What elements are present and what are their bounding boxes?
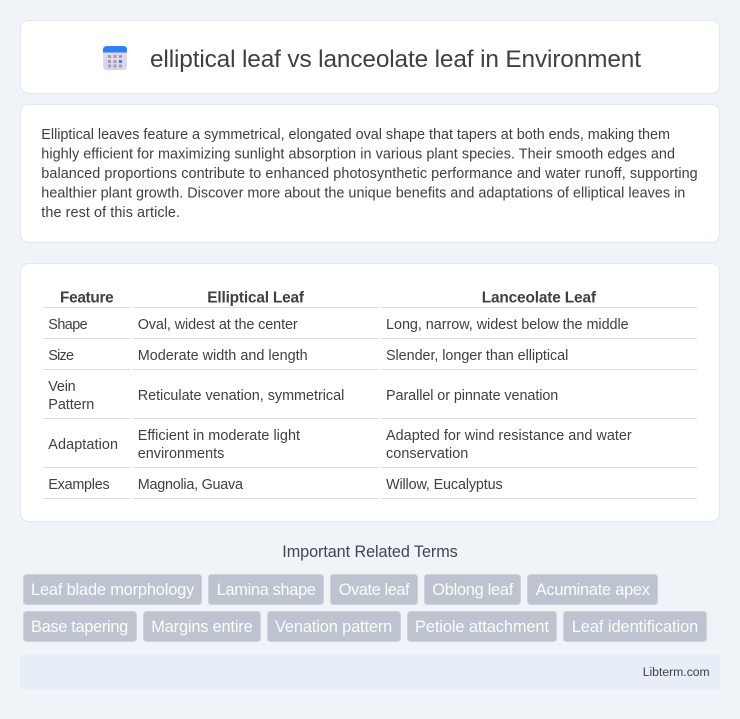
icon: calendar (103, 46, 127, 70)
footer bar (20, 655, 720, 689)
tag: Lamina shape (208, 574, 324, 604)
text block: description: balanced proportions contribute to enhanced photosynthetic performance and water runoff, supporting (41, 166, 698, 182)
tag: Base tapering: Base tapering (31, 618, 128, 636)
tag: Petiole attachment (408, 612, 556, 642)
tag: Ovate leaf: Ovate leaf (339, 581, 410, 599)
row: vein pattern: Reticulate venation, symmetrical (138, 388, 344, 404)
row: adaptation: Adaptation (48, 437, 118, 453)
row: examples: Magnolia, Guava (138, 477, 243, 493)
row: examples (48, 477, 503, 493)
panel: header (20, 20, 720, 94)
row: adaptation: Efficient in moderate light (138, 428, 300, 444)
row: examples: Willow, Eucalyptus (386, 477, 503, 493)
table header: Lanceolate Leaf (482, 289, 597, 306)
tag: Leaf blade morphology (24, 574, 202, 604)
tag: Acuminate apex (528, 574, 658, 604)
footer credit: Libterm.com (643, 665, 710, 679)
tag: Margins entire: Margins entire (151, 618, 253, 636)
tag: Lamina shape: Lamina shape (217, 581, 316, 599)
panel: comparison table (20, 264, 720, 522)
tag: Oblong leaf: Oblong leaf (432, 581, 514, 599)
row: size: Slender, longer than elliptical (386, 348, 568, 364)
tag: Venation pattern: Venation pattern (275, 618, 392, 636)
row: vein pattern (48, 379, 558, 413)
text block: description: the rest of this article. (41, 205, 180, 221)
row: adaptation: environments (138, 446, 224, 462)
row: size: Moderate width and length (138, 348, 308, 364)
row: adaptation (48, 428, 632, 462)
row: size: Size (48, 348, 74, 364)
text block: description: Elliptical leaves feature a symmetrical, elongated oval shape that tapers at both ends, making them (41, 127, 670, 143)
table header: Elliptical Leaf (207, 289, 305, 306)
row: vein pattern: Parallel or pinnate venation (386, 388, 558, 404)
row: shape: Oval, widest at the center (138, 317, 298, 333)
tag: Margins entire (144, 612, 260, 642)
tag: Leaf identification: Leaf identification (572, 618, 698, 636)
panel: intro paragraph (20, 104, 720, 242)
tag: Base tapering (24, 612, 136, 642)
row: adaptation: Adapted for wind resistance and water (386, 428, 632, 444)
row: shape (48, 317, 629, 333)
table header (60, 289, 597, 306)
tag: Acuminate apex: Acuminate apex (536, 581, 651, 599)
heading: related terms: Important Related Terms (282, 543, 458, 561)
row: adaptation: conservation (386, 446, 468, 462)
text block: description (41, 127, 698, 221)
tag: Ovate leaf (330, 574, 418, 604)
tag: Venation pattern (268, 612, 400, 642)
row: examples: Examples (48, 477, 110, 493)
tag: Petiole attachment: Petiole attachment (415, 618, 549, 636)
row: vein pattern: Vein (48, 379, 76, 395)
row: shape: Shape (48, 317, 88, 333)
tag list (24, 574, 706, 642)
tag: Leaf blade morphology: Leaf blade morphology (31, 581, 195, 599)
text block: description: healthier plant growth. Discover more about the unique benefits and adaptations of elliptical leaves in (41, 185, 685, 201)
row: shape: Long, narrow, widest below the middle (386, 317, 629, 333)
tag: Oblong leaf (424, 574, 520, 604)
title: elliptical leaf vs lanceolate leaf in Environment (150, 46, 641, 73)
tag: Leaf identification (564, 612, 706, 642)
row: size (48, 348, 568, 364)
text block: description: highly efficient for maximizing sunlight absorption in various plant species. Their smooth edges and (41, 146, 675, 162)
row: vein pattern: Pattern (48, 397, 94, 413)
table header: Feature (60, 289, 114, 306)
